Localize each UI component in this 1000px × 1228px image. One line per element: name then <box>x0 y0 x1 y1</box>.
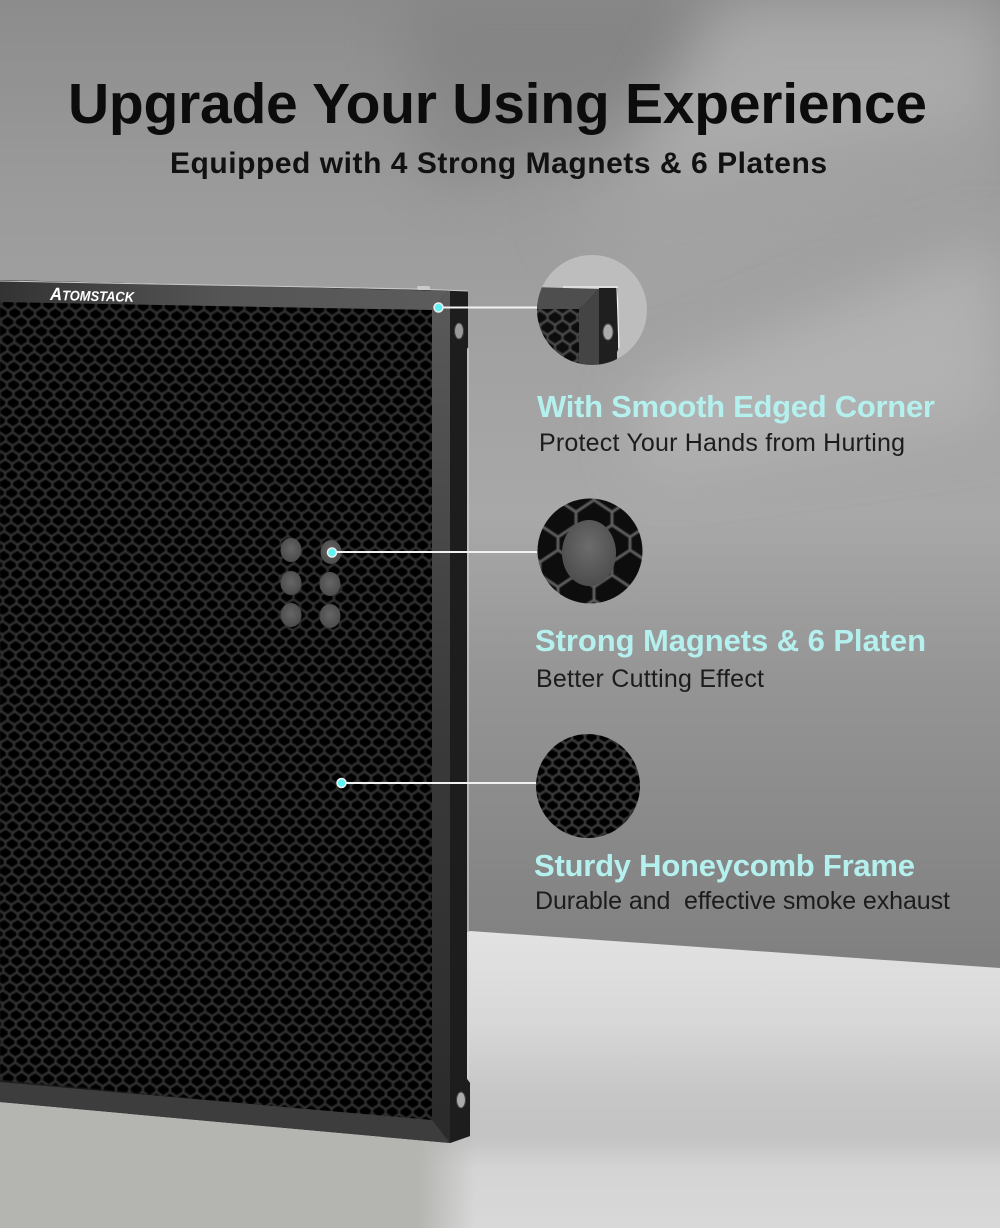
connector line <box>341 782 536 784</box>
feature heading: With Smooth Edged Corner <box>537 389 935 424</box>
connector line <box>438 306 538 308</box>
circle detail: honeycomb <box>536 734 640 838</box>
icon: top screw <box>454 323 464 339</box>
marker dot <box>434 303 443 312</box>
callout: strong magnets <box>328 495 926 693</box>
feature description: Durable and effective smoke exhaust <box>535 887 950 915</box>
panel: top edge highlight <box>0 281 468 291</box>
magnets: six platen holders <box>280 538 342 628</box>
marker dot <box>337 778 346 788</box>
panel: right edge highlight <box>467 348 469 1078</box>
circle detail: frame corner <box>537 255 647 365</box>
callout: smooth edged corner <box>434 250 935 457</box>
panel: honeycomb mesh <box>0 300 434 1122</box>
logo: ATOMSTACK <box>49 284 135 306</box>
feature description: Better Cutting Effect <box>536 665 764 693</box>
panel: top frame bar <box>0 280 448 310</box>
title: Upgrade Your Using Experience <box>68 72 927 136</box>
panel: outer frame <box>0 280 470 1143</box>
connector line <box>331 551 537 553</box>
panel: bottom frame bar <box>0 1082 450 1143</box>
marker dot <box>328 548 336 557</box>
circle detail: magnet <box>535 495 645 605</box>
honeycomb panel product <box>0 280 470 1143</box>
panel: right dark strip <box>450 291 470 1143</box>
icon: bottom screw <box>456 1092 466 1108</box>
callout: honeycomb frame <box>337 730 950 915</box>
feature description: Protect Your Hands from Hurting <box>539 429 905 457</box>
icon: top clip <box>417 286 430 290</box>
feature heading: Strong Magnets & 6 Platen <box>535 623 926 658</box>
feature heading: Sturdy Honeycomb Frame <box>534 848 915 883</box>
panel: right bevel <box>432 291 450 1143</box>
subtitle: Equipped with 4 Strong Magnets & 6 Platens <box>170 147 827 180</box>
